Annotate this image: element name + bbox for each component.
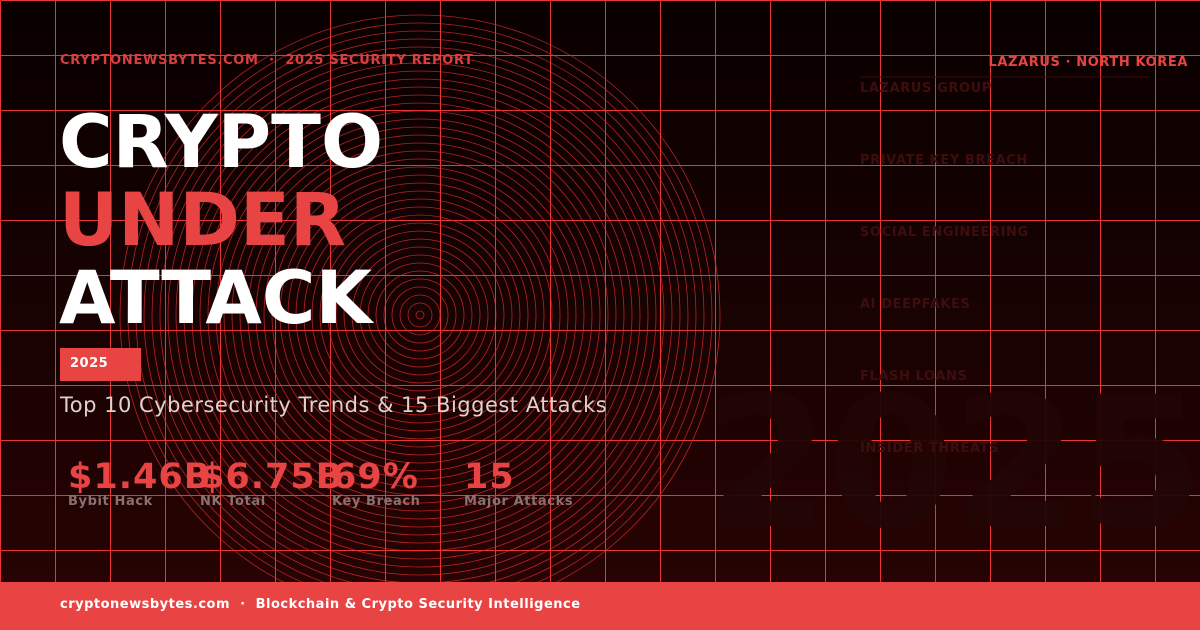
stat: attacks: Major Attacks bbox=[464, 494, 573, 509]
faded threat list: INSIDER THREATS bbox=[860, 441, 999, 456]
footer bar: cryptonewsbytes.com · Blockchain & Crypto Security Intelligence bbox=[60, 597, 581, 612]
stat: bybit: Bybit Hack bbox=[68, 494, 153, 509]
year badge bbox=[60, 348, 141, 381]
stat: NK: NK Total bbox=[200, 494, 266, 509]
year badge: 2025 bbox=[70, 356, 108, 371]
faded threat list: AI DEEPFAKES bbox=[860, 297, 970, 312]
title: ATTACK bbox=[59, 256, 372, 341]
stat: attacks: 15 bbox=[464, 457, 515, 497]
subtitle: Top 10 Cybersecurity Trends & 15 Biggest Attacks bbox=[60, 393, 607, 417]
watermark year 2025: 2025 bbox=[703, 357, 1200, 569]
stat: key breach: Key Breach bbox=[332, 494, 421, 509]
stat: attacks bbox=[464, 457, 573, 509]
top left header: CRYPTONEWSBYTES.COM · 2025 SECURITY REPORT bbox=[60, 53, 474, 68]
stat: NK: $6.75B bbox=[200, 457, 343, 497]
faded threat list: SOCIAL ENGINEERING bbox=[860, 225, 1029, 240]
title bbox=[59, 100, 383, 341]
stats row bbox=[68, 457, 573, 509]
top right tag: LAZARUS · NORTH KOREA bbox=[989, 55, 1188, 70]
faded threat list: PRIVATE KEY BREACH bbox=[860, 153, 1028, 168]
title: UNDER bbox=[59, 178, 346, 263]
faded threat list bbox=[860, 81, 1029, 456]
faded threat list: FLASH LOANS bbox=[860, 369, 967, 384]
stat: key breach: 69% bbox=[332, 457, 419, 497]
footer bar bbox=[0, 582, 1200, 630]
title: CRYPTO bbox=[59, 100, 383, 185]
stat: bybit: $1.46B bbox=[68, 457, 211, 497]
faded threat list: LAZARUS GROUP bbox=[860, 81, 992, 96]
